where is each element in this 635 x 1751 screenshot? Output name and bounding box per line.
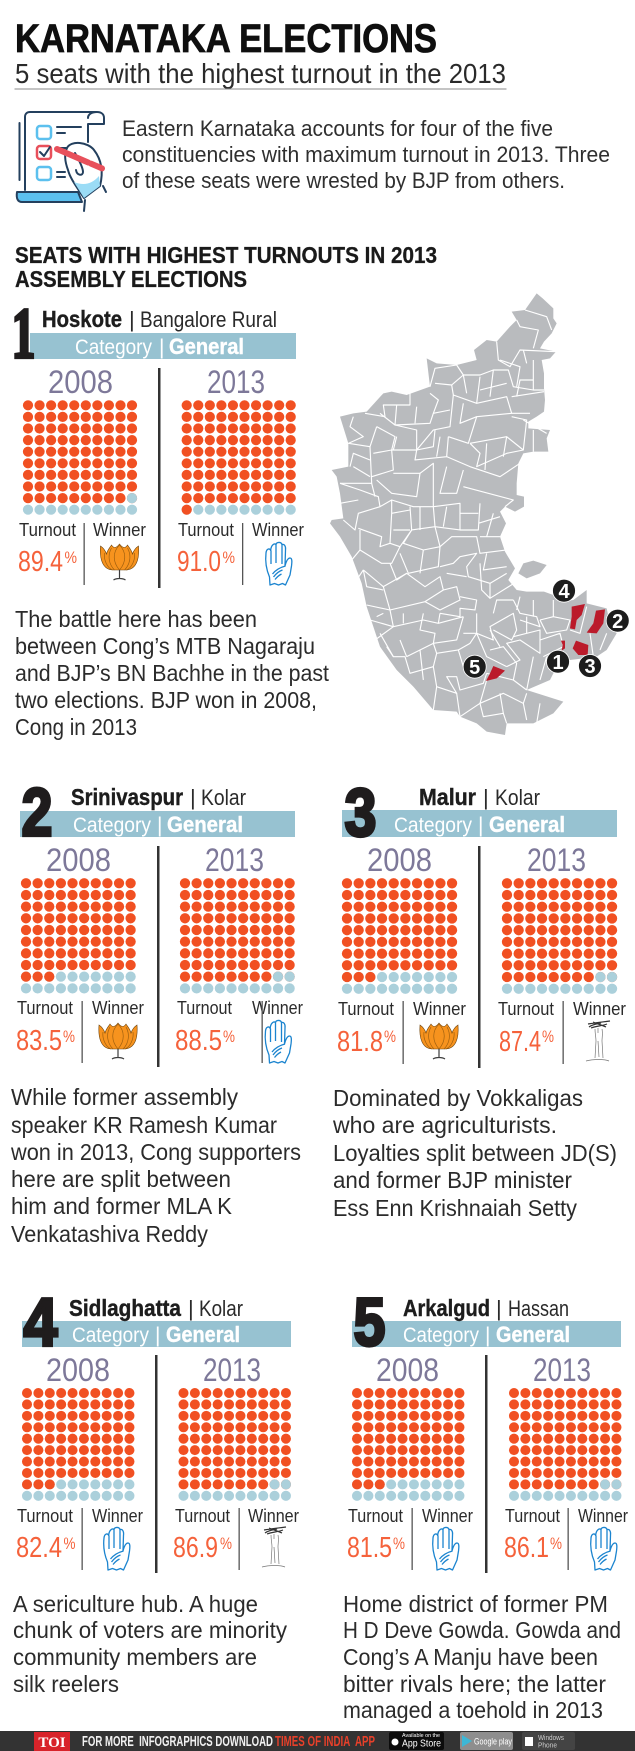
seat 1 text: Cong in 2013 (15, 714, 137, 740)
seat 3 year 2013: 2013 (527, 842, 586, 878)
seat 4 stats 2013: Turnout (175, 1506, 230, 1526)
map marker 4: 4 (558, 581, 570, 603)
seat 2 text (10, 1084, 301, 1247)
footer bar (0, 1731, 635, 1751)
seat 3 stats 2013: Winner (573, 999, 626, 1019)
seat 2 winner separator (262, 1001, 263, 1063)
seat 1 header: Bangalore Rural (140, 307, 277, 332)
seat 5 stats 2008: Winner (422, 1506, 473, 1526)
seat 2 header: General (167, 812, 243, 837)
seat 4 header: Kolar (199, 1296, 243, 1321)
seat 3 header: 3 (344, 774, 376, 850)
seat 1 stats 2008 (18, 520, 146, 585)
subtitle: 5 seats with the highest turnout in the 2013 (15, 58, 506, 89)
seat 4 stats 2008: Winner (92, 1506, 143, 1526)
seat 3 text: who are agriculturists. (332, 1112, 557, 1138)
seat 2 year 2013: 2013 (205, 842, 264, 878)
seat 3 text (332, 1085, 617, 1221)
seat 1 stats 2013: 91.0 (177, 546, 221, 578)
seat 1 year 2013: 2013 (207, 364, 265, 400)
seat 2 stats 2008: Winner (92, 998, 144, 1018)
icon: JD(S) farmer (262, 1527, 286, 1567)
seat 5 text: managed a toehold in 2013 (343, 1697, 603, 1723)
seat 5 text: bitter rivals here; the latter (343, 1671, 606, 1697)
map marker 2: 2 (612, 611, 623, 633)
seat 5 dot chart 2013 (509, 1388, 621, 1501)
section heading (15, 242, 437, 292)
seat 2 header: | (190, 785, 196, 810)
seat 4 stats 2008: Turnout (17, 1506, 73, 1526)
seat 1 stats 2013: Turnout (178, 520, 234, 540)
map: lake island district (518, 561, 547, 578)
seat 5 text: Cong’s A Manju have been (343, 1644, 598, 1670)
map: constituency boundaries (340, 310, 607, 723)
seat 3 header: General (489, 812, 565, 837)
seat 5 stats 2013: % (550, 1534, 562, 1553)
badge: Windows Phone: Windows (538, 1735, 564, 1742)
icon: Congress hand (433, 1527, 459, 1570)
seat 3 text: Dominated by Vokkaligas (333, 1085, 583, 1111)
seat 5 header: 5 (354, 1284, 386, 1360)
seat 3 stats 2013 (498, 999, 626, 1064)
seat 3 stats 2008: % (384, 1027, 396, 1046)
footer call to action: FOR MORE INFOGRAPHICS DOWNLOAD (82, 1734, 273, 1750)
seat 5 divider (485, 1355, 488, 1573)
seat 3 text: and former BJP minister (333, 1167, 572, 1193)
seat 3 year 2008: 2008 (367, 842, 432, 878)
map marker 2 (606, 609, 629, 633)
seat 1 header: | (159, 336, 164, 359)
seat 5 year 2013: 2013 (533, 1352, 591, 1388)
map marker 1 (546, 650, 570, 674)
seat 5 header: Category (403, 1324, 479, 1347)
seat 5 header: | (485, 1324, 490, 1347)
seat 3 text: Loyalties split between JD(S) (333, 1140, 617, 1166)
seat 3 header: Kolar (495, 785, 540, 810)
seat 2 text: won in 2013, Cong supporters (10, 1139, 301, 1165)
seat 4 text: chunk of voters are minority (13, 1617, 287, 1643)
intro text: Eastern Karnataka accounts for four of the five (122, 116, 553, 141)
seat 1 stats 2008: Winner (93, 520, 146, 540)
section heading: SEATS WITH HIGHEST TURNOUTS IN 2013 (15, 242, 437, 268)
icon: BJP lotus (420, 1023, 458, 1059)
seat 5 stats 2013 (504, 1506, 628, 1570)
seat 4 text: A sericulture hub. A huge (13, 1591, 258, 1617)
seat 5 stats 2013: Turnout (505, 1506, 560, 1526)
seat 2 year 2008: 2008 (46, 842, 111, 878)
icon: BJP lotus (99, 1023, 137, 1059)
map marker 3: 3 (584, 656, 596, 678)
seat 1 header: 1 (12, 294, 36, 374)
map: Karnataka constituencies (330, 293, 617, 735)
seat 5 header: General (496, 1322, 570, 1347)
map marker 5: 5 (469, 657, 480, 679)
seat 2 dot chart 2008 (21, 878, 136, 993)
seat 1 year 2008: 2008 (48, 364, 113, 400)
seat 1 text: two elections. BJP won in 2008, (15, 687, 317, 713)
seat 1 stats 2013: % (222, 548, 235, 567)
seat 2 text: speaker KR Ramesh Kumar (11, 1112, 277, 1138)
seat 1 header (12, 294, 296, 374)
seat 5 stats 2008: Turnout (348, 1506, 403, 1526)
seat 2 stats 2008: Turnout (17, 998, 73, 1018)
seat 4 stats 2008 (16, 1506, 143, 1570)
seat 2 text: him and former MLA K (11, 1193, 232, 1219)
seat 1 text: between Cong’s MTB Nagaraju (15, 633, 315, 659)
seat 2 stats 2008 (16, 998, 144, 1063)
seat 4 header: | (188, 1296, 194, 1321)
seat 5 year 2008: 2008 (376, 1352, 439, 1388)
seat 1 text: The battle here has been (15, 606, 257, 632)
TOI logo (34, 1732, 70, 1751)
seat 1 stats 2013 (177, 520, 304, 585)
badge: Windows Phone: Phone (538, 1742, 557, 1750)
seat 4 stats 2013 (173, 1506, 299, 1570)
seat 4 year 2013: 2013 (203, 1352, 261, 1388)
seat 4 header: Sidlaghatta (69, 1295, 181, 1321)
seat 3 stats 2013: 87.4 (499, 1026, 541, 1058)
icon: Congress hand (104, 1527, 130, 1570)
seat 2 text: Venkatashiva Reddy (11, 1221, 208, 1247)
seat 5 stats 2008: 81.5 (347, 1532, 392, 1564)
seat 3 header: Category (394, 814, 472, 837)
seat 1 header: Category (75, 336, 152, 359)
seat 4 dot chart 2013 (178, 1388, 291, 1501)
seat 5 text (343, 1591, 621, 1723)
seat 2 divider (157, 846, 160, 1067)
seat 5 header (352, 1284, 621, 1360)
seat 2 stats 2013: Winner (252, 998, 303, 1018)
panel: seat 3 Malur (332, 774, 626, 1221)
seat 1 stats 2008: 89.4 (18, 546, 63, 578)
seat 1 text: and BJP’s BN Bachhe in the past (15, 660, 329, 686)
seat 5 header: Arkalgud (403, 1295, 490, 1321)
seat 1 stats 2013: Winner (252, 520, 304, 540)
seat 4 text: community members are (13, 1644, 257, 1670)
seat 2 stats 2008: 83.5 (16, 1025, 62, 1057)
panel: seat 5 Arkalgud (343, 1284, 628, 1723)
seat 2 header: Kolar (201, 785, 246, 810)
icon: Congress hand (591, 1527, 617, 1570)
seat 3 stats 2013: % (542, 1027, 554, 1046)
seat 3 header: | (483, 785, 489, 810)
seat 4 text: silk reelers (13, 1671, 119, 1697)
seat 5 stats 2008: % (393, 1534, 405, 1553)
seat 3 stats 2013: Turnout (498, 999, 554, 1019)
seat 2 stats 2013 (175, 998, 303, 1057)
seat 4 stats 2013: % (220, 1534, 232, 1553)
badge: App Store (389, 1732, 444, 1750)
icon: BJP lotus (100, 544, 139, 580)
seat 2 header: Category (73, 814, 151, 837)
seat 4 divider (155, 1355, 158, 1573)
seat 2 header (20, 774, 295, 850)
seat 4 header: Category (72, 1324, 149, 1347)
seat 5 text: Home district of former PM (343, 1591, 608, 1617)
seat 5 header: | (496, 1296, 502, 1321)
map: highlighted seats (486, 604, 605, 681)
seat 1 header: | (129, 307, 135, 332)
seat 2 header: Srinivaspur (71, 784, 183, 810)
seat 3 header: Malur (419, 784, 476, 810)
seat 4 header: 4 (24, 1284, 58, 1360)
seat 2 stats 2008: % (63, 1027, 75, 1046)
panel: seat 1 Hoskote (12, 294, 329, 740)
seat 2 text: here are split between (11, 1166, 231, 1192)
seat 3 divider (478, 846, 480, 1068)
intro text (122, 116, 610, 193)
seat 3 stats 2008: 81.8 (337, 1026, 383, 1058)
seat 1 header: Hoskote (42, 306, 122, 332)
seat 4 stats 2008: % (64, 1534, 76, 1553)
TOI logo: TOI (38, 1735, 66, 1751)
seat 5 dot chart 2008 (352, 1388, 464, 1501)
seat 4 dot chart 2008 (22, 1388, 134, 1501)
seat 3 dot chart 2013 (502, 878, 617, 994)
seat 4 header: General (166, 1322, 240, 1347)
title: KARNATAKA ELECTIONS (15, 17, 437, 61)
seat 2 text: While former assembly (11, 1084, 238, 1110)
seat 1 divider (158, 368, 160, 588)
seat 2 dot chart 2013 (180, 878, 295, 993)
seat 2 header: | (157, 814, 162, 837)
seat 1 stats 2008: % (64, 548, 77, 567)
intro text: constituencies with maximum turnout in 2013. Three (122, 142, 610, 167)
panel: seat 4 Sidlaghatta (13, 1284, 299, 1697)
badge: Windows Phone (522, 1732, 575, 1750)
seat 4 stats 2013: 86.9 (173, 1532, 218, 1564)
seat 1 header: General (169, 334, 244, 359)
section heading: ASSEMBLY ELECTIONS (15, 266, 247, 292)
seat 2 stats 2013: Turnout (177, 998, 232, 1018)
seat 4 stats 2013: Winner (248, 1506, 299, 1526)
intro text: of these seats were wrested by BJP from others. (122, 168, 565, 193)
seat 2 stats 2013: % (223, 1027, 235, 1046)
badge: App Store: Available on the (402, 1733, 440, 1739)
seat 5 stats 2013: Winner (578, 1506, 628, 1526)
seat 2 stats 2013: 88.5 (175, 1025, 222, 1057)
seat 5 header: Hassan (508, 1296, 569, 1321)
icon: ballot checklist (17, 112, 108, 211)
seat 5 stats 2008 (347, 1506, 473, 1570)
icon: Congress hand (265, 1020, 291, 1063)
badge: Google Play: Google play (474, 1736, 512, 1746)
badge: App Store: App Store (402, 1738, 441, 1750)
seat 1 dot chart 2013 (182, 400, 296, 515)
map marker 5 (463, 655, 486, 679)
seat 3 stats 2008: Winner (413, 999, 466, 1019)
footer call to action: TIMES OF INDIA APP (275, 1734, 375, 1750)
icon: JD(S) farmer (586, 1021, 610, 1061)
seat 3 stats 2008 (337, 999, 466, 1064)
seat 4 header: | (155, 1324, 160, 1347)
seat 4 stats 2008: 82.4 (16, 1532, 62, 1564)
seat 3 header: | (478, 814, 483, 837)
seat 3 stats 2008: Turnout (338, 999, 394, 1019)
seat 3 dot chart 2008 (342, 878, 457, 994)
seat 4 text (13, 1591, 287, 1697)
seat 1 text (15, 606, 329, 740)
seat 1 dot chart 2008 (23, 400, 137, 515)
map marker 4 (552, 579, 576, 603)
icon: Congress hand (266, 542, 292, 585)
seat 2 header: 2 (22, 774, 52, 850)
seat 5 stats 2013: 86.1 (504, 1532, 549, 1564)
seat 1 stats 2008: Turnout (19, 520, 76, 540)
map marker 3 (578, 654, 602, 678)
seat 3 header (342, 774, 617, 850)
seat 4 year 2008: 2008 (46, 1352, 110, 1388)
seat 3 text: Ess Enn Krishnaiah Setty (333, 1195, 577, 1221)
panel: seat 2 Srinivaspur (10, 774, 303, 1247)
seat 4 header (22, 1284, 291, 1360)
badge: Google Play (460, 1732, 513, 1750)
map marker 1: 1 (552, 652, 564, 674)
